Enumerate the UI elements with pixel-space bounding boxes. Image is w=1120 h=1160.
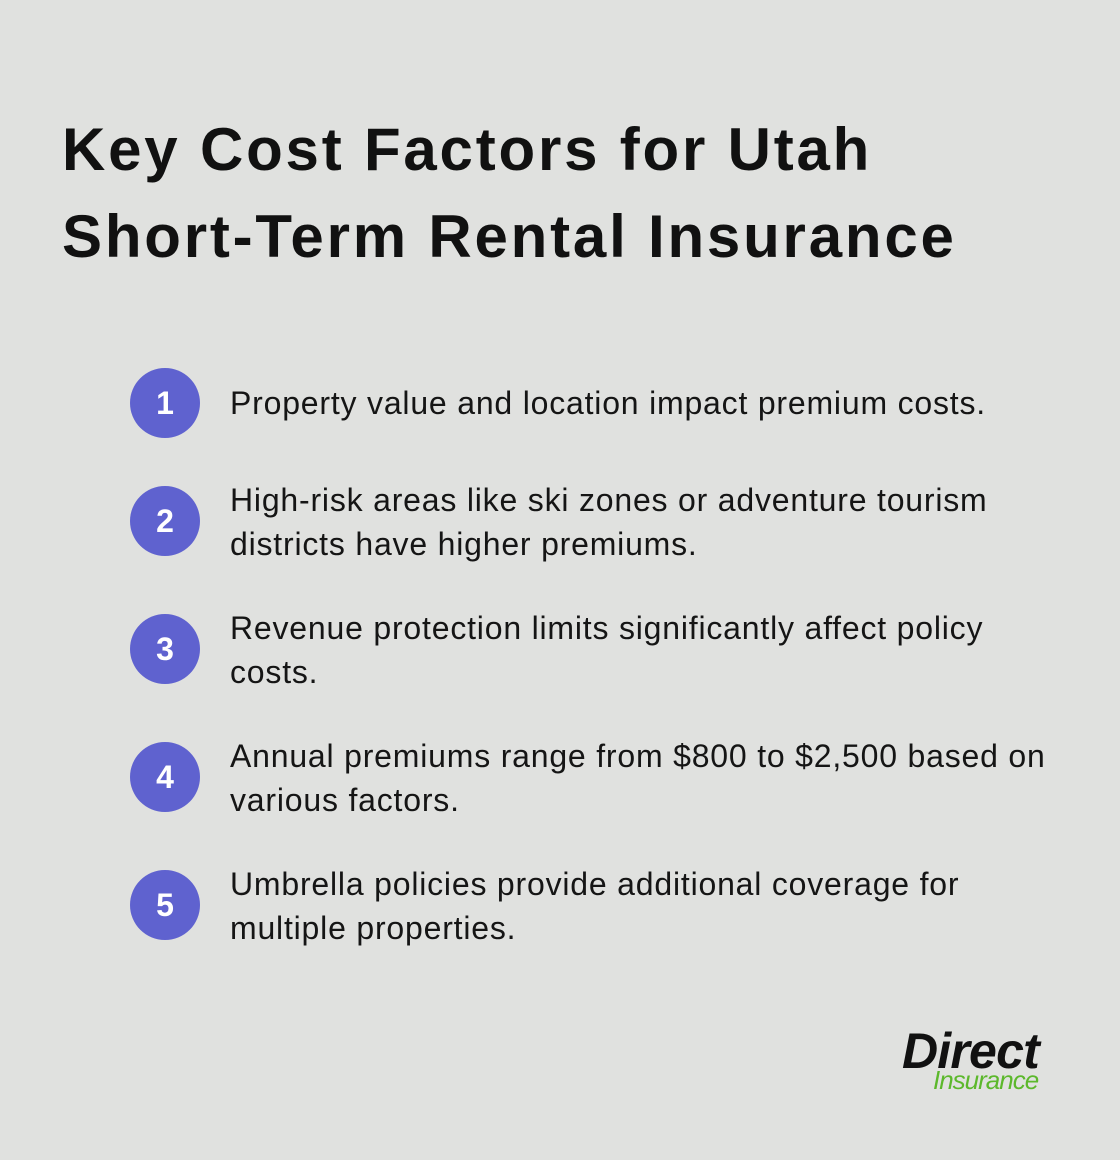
badge 3: 3: [156, 631, 174, 667]
text 5: Umbrella policies provide additional coverage for: [230, 866, 959, 902]
text 3: [230, 610, 983, 690]
title: [62, 116, 957, 270]
text 4: [230, 738, 1046, 818]
badge 2: 2: [156, 503, 174, 539]
badge 3: [130, 614, 200, 684]
badge 4: 4: [156, 759, 174, 795]
item 2: [130, 482, 988, 562]
title: Key Cost Factors for Utah: [62, 116, 872, 183]
title: Short-Term Rental Insurance: [62, 203, 957, 270]
text 5: multiple properties.: [230, 910, 516, 946]
text 1: Property value and location impact premium costs.: [230, 385, 986, 421]
badge 1: [130, 368, 200, 438]
item 4: [130, 738, 1046, 818]
text 2: districts have higher premiums.: [230, 526, 698, 562]
badge 5: 5: [156, 887, 174, 923]
item 1: [130, 368, 986, 438]
item 5: [130, 866, 959, 946]
text 2: High-risk areas like ski zones or adventure tourism: [230, 482, 988, 518]
text 5: [230, 866, 959, 946]
badge 4: [130, 742, 200, 812]
text 3: costs.: [230, 654, 318, 690]
logo: Insurance: [933, 1065, 1038, 1095]
text 4: Annual premiums range from $800 to $2,500 based on: [230, 738, 1046, 774]
logo: Direct: [902, 1023, 1039, 1079]
text 3: Revenue protection limits significantly affect policy: [230, 610, 983, 646]
text 2: [230, 482, 988, 562]
item 3: [130, 610, 983, 690]
badge 1: 1: [156, 385, 174, 421]
text 4: various factors.: [230, 782, 460, 818]
badge 2: [130, 486, 200, 556]
badge 5: [130, 870, 200, 940]
